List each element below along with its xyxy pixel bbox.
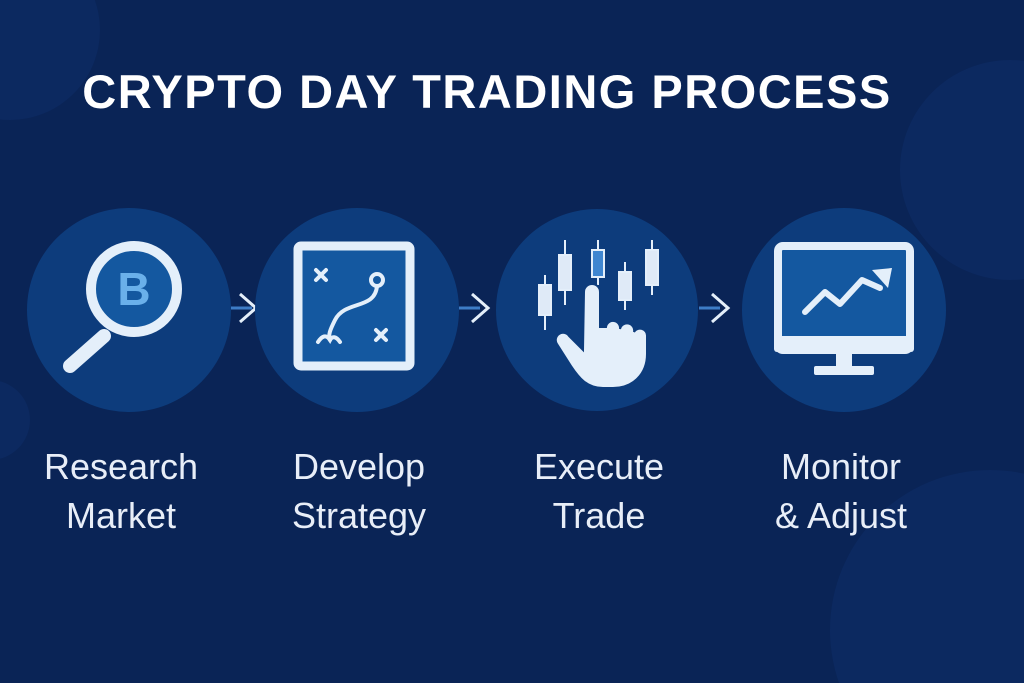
arrow 3 [699, 294, 728, 322]
label: monitor & adjust: & Adjust [775, 495, 907, 536]
label: develop strategy [292, 446, 426, 536]
step 3 circle: execute [496, 209, 698, 411]
title: CRYPTO DAY TRADING PROCESS [82, 65, 892, 118]
step 1 circle: research [27, 208, 231, 412]
step 1 circle: research: B [117, 263, 151, 315]
step 4 circle: monitor [742, 208, 946, 412]
label: monitor & adjust: Monitor [781, 446, 901, 487]
arrow 2 [459, 294, 488, 322]
label: execute trade [534, 446, 664, 536]
label: develop strategy: Strategy [292, 495, 426, 536]
label: execute trade: Execute [534, 446, 664, 487]
label: execute trade: Trade [553, 495, 645, 536]
label: research market [44, 446, 198, 536]
label: develop strategy: Develop [293, 446, 425, 487]
label: monitor & adjust [775, 446, 907, 536]
step 2 circle: strategy [255, 208, 459, 412]
arrow 1 [231, 294, 256, 322]
label: research market: Research [44, 446, 198, 487]
label: research market: Market [66, 495, 176, 536]
